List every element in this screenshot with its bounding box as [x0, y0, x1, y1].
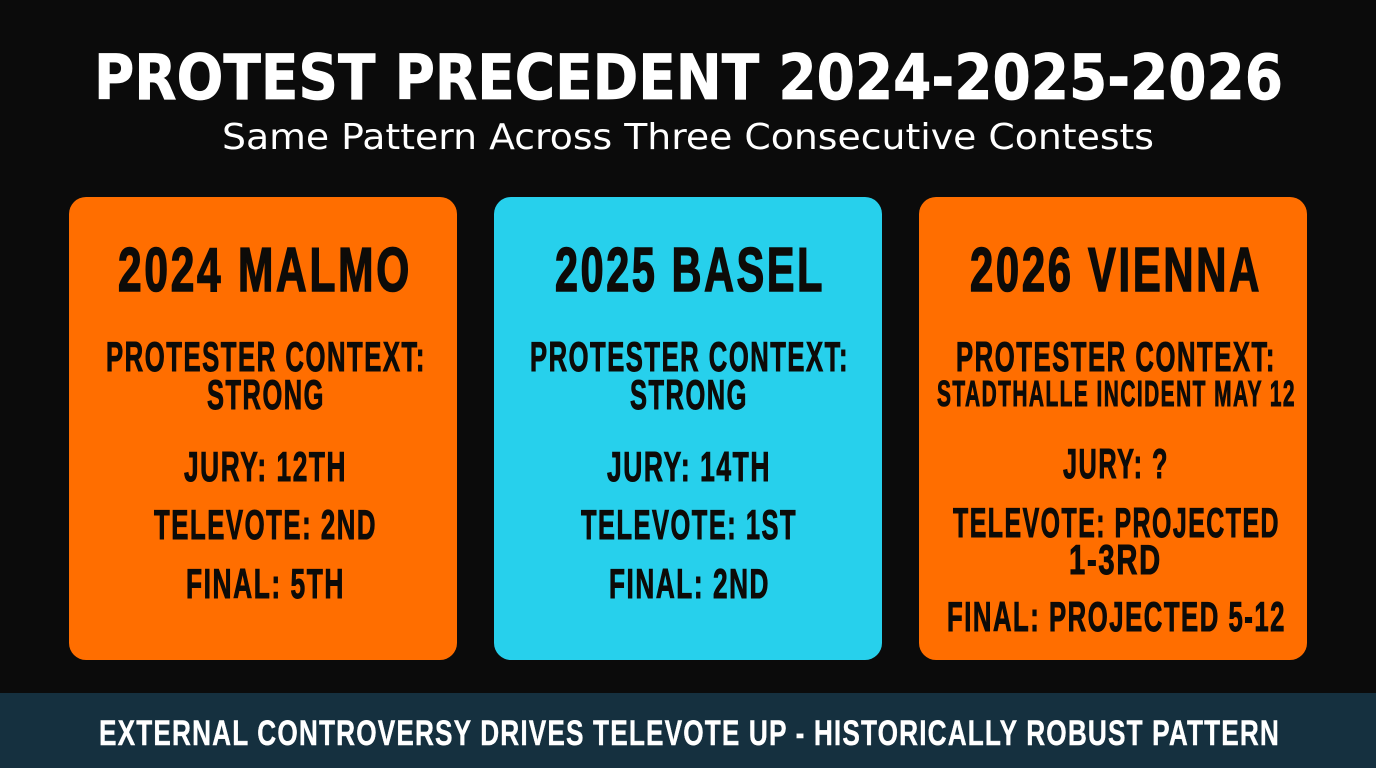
televote projection: 1-3RD	[1069, 536, 1162, 583]
jury result: JURY: ?	[1063, 440, 1169, 487]
final result: FINAL: 5TH	[186, 560, 345, 607]
protester context	[937, 333, 1296, 414]
protester context: PROTESTER CONTEXT:	[530, 333, 849, 380]
jury result: JURY: 14TH	[607, 443, 771, 490]
footer banner	[0, 693, 1376, 768]
subtitle: Same Pattern Across Three Consecutive Contests	[222, 117, 1154, 158]
televote projection	[953, 499, 1280, 583]
final result: FINAL: 2ND	[609, 560, 770, 607]
televote result: TELEVOTE: 2ND	[154, 501, 377, 548]
card background	[919, 197, 1307, 660]
protester context: PROTESTER CONTEXT:	[106, 333, 426, 380]
protester context	[530, 333, 849, 418]
jury result: JURY: 12TH	[184, 443, 347, 490]
heading: 2024 MALMO	[118, 236, 412, 305]
televote result: TELEVOTE: 1ST	[581, 501, 797, 548]
heading: 2025 BASEL	[555, 236, 825, 305]
panel: 2026 Vienna	[919, 197, 1307, 660]
card background	[69, 197, 457, 660]
protester context: STRONG	[630, 371, 748, 418]
card background	[494, 197, 882, 660]
panel: 2025 Basel	[494, 197, 882, 660]
panel: 2024 Malmo	[69, 197, 457, 660]
protester context: STRONG	[207, 371, 325, 418]
protester context	[106, 333, 426, 418]
